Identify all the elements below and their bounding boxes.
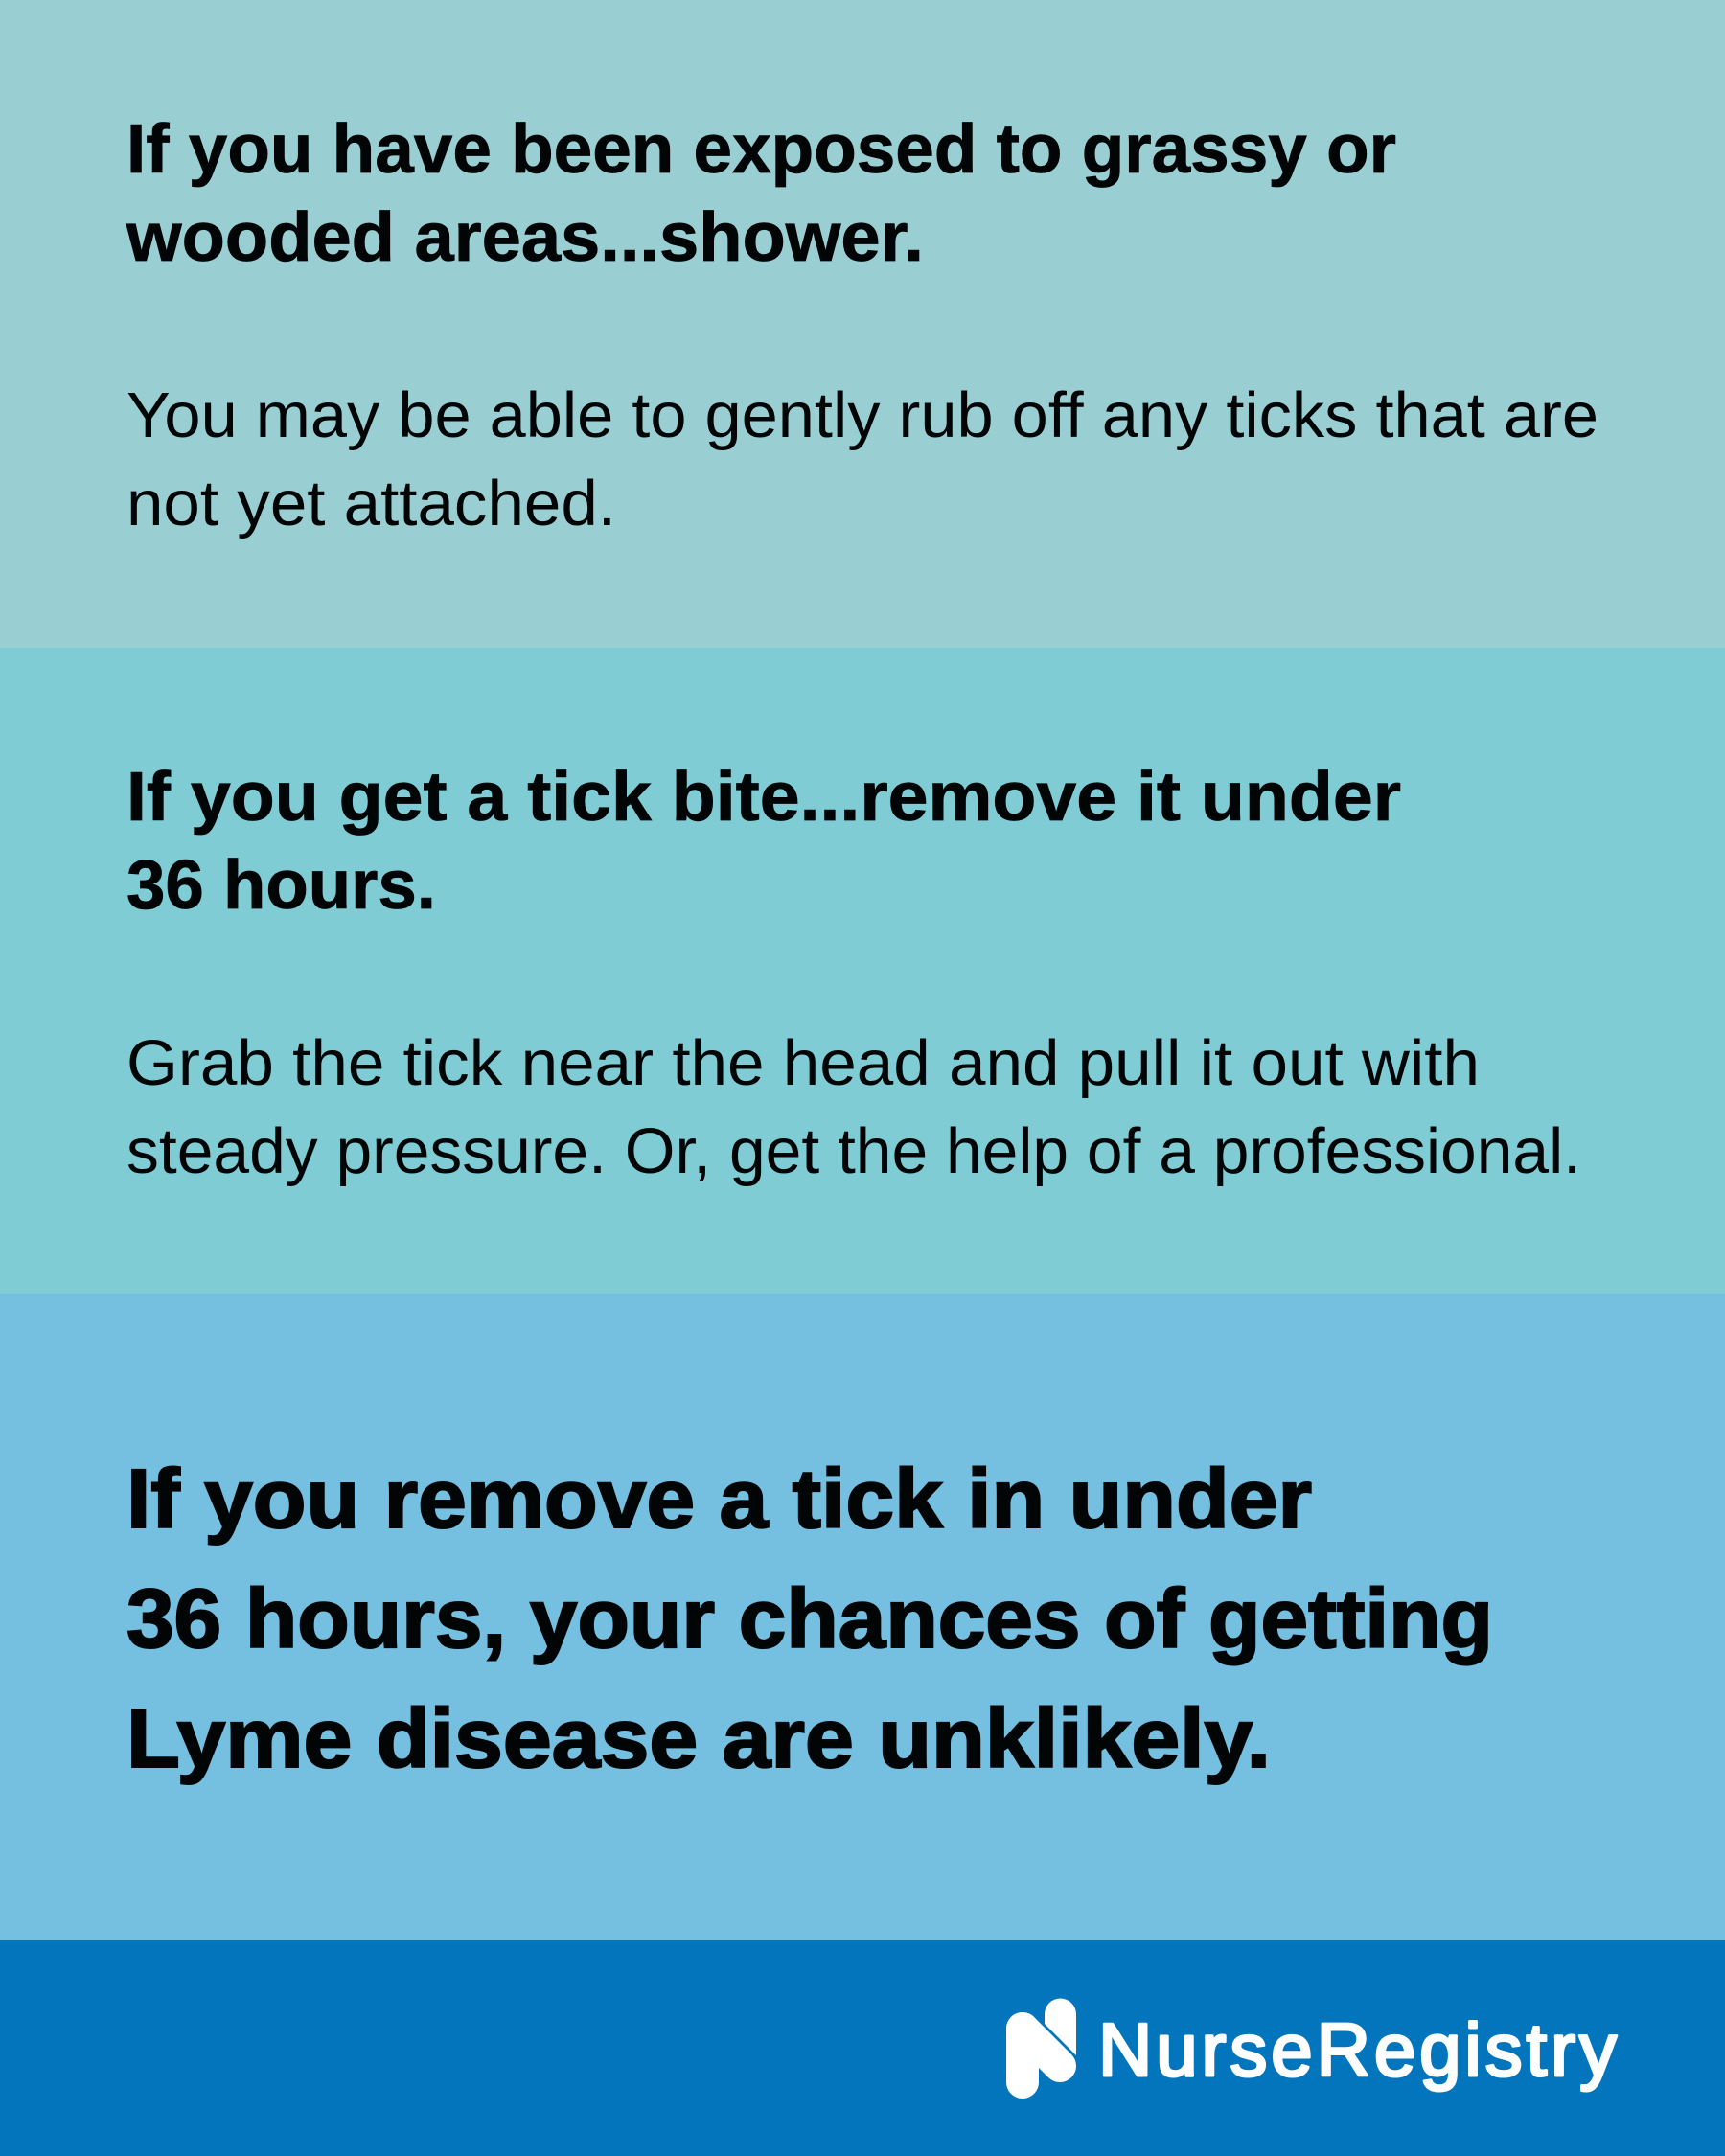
heading: shower: wooded areas...shower. — [126, 199, 924, 276]
text block: how to remove: steady pressure. Or, get the help of a professional. — [126, 1115, 1581, 1187]
logo wordmark: NurseRegistry — [1098, 2007, 1617, 2092]
panel: shower after exposure — [0, 0, 1725, 648]
heading: remove under 36 hours — [126, 759, 1401, 924]
text block: how to remove: Grab the tick near the head and pull it out with — [126, 1027, 1480, 1099]
panel: key takeaway — [0, 1294, 1725, 1941]
heading: Lyme disease chances — [126, 1453, 1493, 1785]
text block: rub off ticks: You may be able to gently rub off any ticks that are — [126, 379, 1598, 451]
heading: Lyme disease chances: If you remove a tick in under — [126, 1453, 1312, 1546]
heading: Lyme disease chances: Lyme disease are unklikely. — [126, 1692, 1271, 1785]
text block: how to remove — [126, 1027, 1581, 1187]
footer band — [0, 1940, 1725, 2156]
heading: remove under 36 hours: If you get a tick bite...remove it under — [126, 759, 1401, 836]
heading: shower — [126, 111, 1396, 276]
icon: NurseRegistry logo mark — [1006, 1999, 1076, 2099]
heading: Lyme disease chances: 36 hours, your chances of getting — [126, 1572, 1493, 1665]
text block: rub off ticks: not yet attached. — [126, 468, 616, 539]
heading: shower: If you have been exposed to grassy or — [126, 111, 1396, 188]
text block: rub off ticks — [126, 379, 1598, 539]
panel: remove the tick — [0, 648, 1725, 1294]
heading: remove under 36 hours: 36 hours. — [126, 847, 436, 924]
